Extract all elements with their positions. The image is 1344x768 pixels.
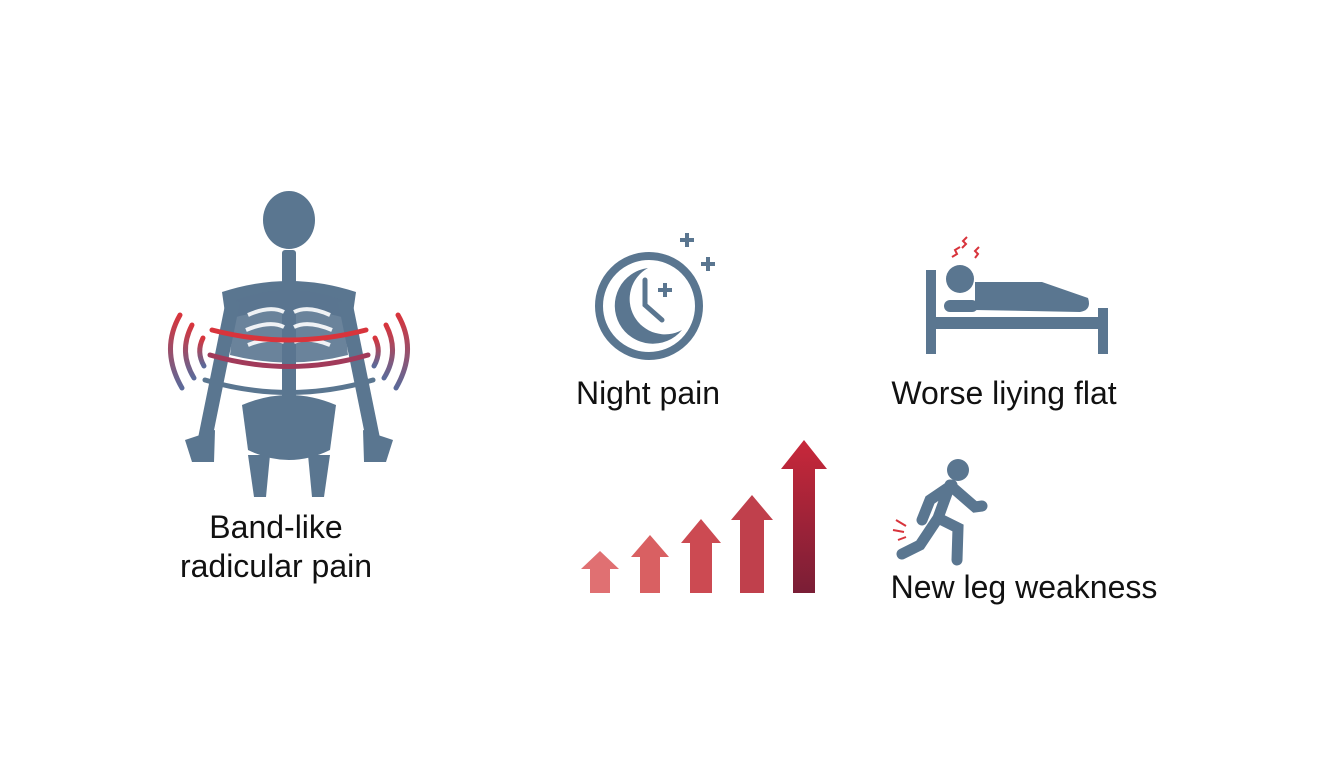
icon: bed	[926, 265, 1108, 354]
icon: skeleton with pain bands	[170, 191, 408, 497]
icon: running person	[902, 459, 982, 560]
label: radicular pain line: radicular pain	[180, 548, 372, 584]
icon: leg pain marks	[893, 520, 906, 540]
chart: rising arrows	[581, 440, 827, 593]
label: worse lying flat: Worse liying flat	[891, 375, 1117, 411]
icon: pain marks	[952, 237, 979, 258]
icon: night clock	[599, 233, 715, 356]
label: band-like radicular pain: Band-like	[209, 509, 343, 545]
label: night pain: Night pain	[576, 375, 720, 411]
label: new leg weakness: New leg weakness	[891, 569, 1157, 605]
